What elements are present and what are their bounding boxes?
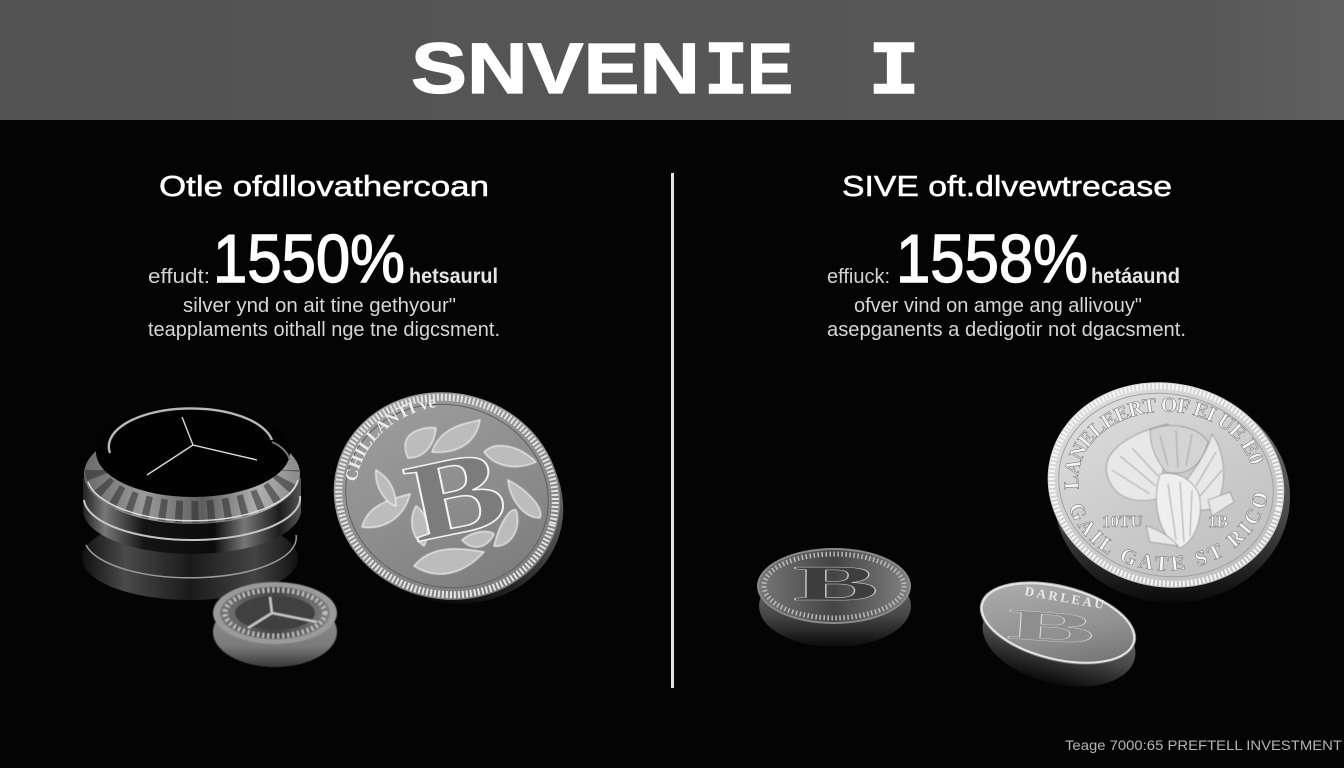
left description: silver ynd on ait tine gethyour" (183, 295, 456, 317)
title: E (747, 30, 793, 109)
left description (148, 295, 500, 341)
right description: ofver vind on amge ang allivouy" (854, 295, 1142, 317)
coin lettering: 1B (1208, 512, 1228, 531)
coin lettering: DARLEAU (1024, 583, 1106, 612)
coin lettering: GAIL GATE ST RICO (1070, 492, 1267, 571)
title (411, 30, 920, 116)
coin lettering (1064, 398, 1267, 571)
coin lettering: CHILLANTI ve (346, 400, 436, 480)
icon: large silver B coin (334, 392, 564, 604)
left statistic row: effudt: (148, 266, 210, 288)
left description: teapplaments oithall nge tne digcsment. (148, 319, 500, 341)
icon: stacked silver ring (82, 407, 301, 600)
icon: large silver eagle coin (1048, 382, 1290, 600)
coin monogram: B (395, 425, 516, 566)
right description (827, 295, 1186, 341)
left statistic row: hetsaurul (409, 265, 498, 288)
coin lettering: LANELEERT OF EI UE E0 (1064, 398, 1263, 490)
right heading: SIVE oft.dlvewtrecase (842, 171, 1172, 203)
title: I (868, 30, 920, 116)
left statistic row: 1550% (213, 221, 405, 297)
panel: right column text (827, 171, 1186, 341)
header band (0, 0, 1344, 120)
right description: asepganents a dedigotir not dgacsment. (827, 319, 1186, 341)
coin foliage (362, 420, 541, 574)
coin eagle (1106, 424, 1234, 548)
footer note: Teage 7000:65 PREFTELL INVESTMENT (1065, 737, 1342, 753)
right statistic row: hetáaund (1091, 265, 1180, 288)
icon: small B coin right (971, 567, 1145, 702)
left statistic row (148, 221, 498, 297)
right statistic row: 1558% (896, 221, 1088, 297)
icon: small B coin left (757, 548, 911, 647)
coin monogram: B (793, 556, 879, 611)
right statistic row (827, 221, 1180, 297)
title: SNVEN (411, 30, 700, 109)
vertical divider (671, 173, 674, 688)
icon: small star coin (213, 582, 337, 667)
right statistic row: effiuck: (827, 266, 890, 288)
coin monogram: B (1005, 600, 1097, 654)
left heading: Otle ofdllovathercoan (159, 171, 489, 203)
coin lettering: 10TU (1102, 512, 1143, 531)
title: I (704, 30, 748, 116)
panel: left column text (148, 171, 500, 341)
